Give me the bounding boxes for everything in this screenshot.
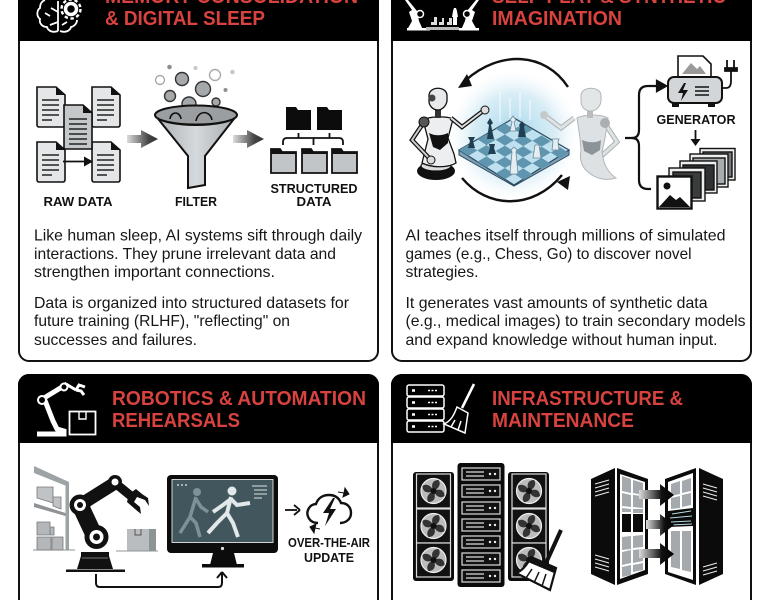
icon: cardboard box (116, 529, 158, 551)
text block: memory consolidation description: future training (RLHF), "reflecting" on (34, 313, 290, 330)
heading: self-play (492, 0, 726, 30)
text block: memory consolidation description (34, 228, 362, 349)
icon: robot arm and box (37, 384, 96, 436)
icon: generator printer (668, 56, 737, 107)
label: structured data: DATA (296, 194, 332, 209)
arrow: filter to structured data (233, 130, 264, 148)
illustration: factory robot arm (66, 475, 149, 572)
label: over-the-air update (288, 535, 371, 565)
icon: brain and gear (37, 0, 80, 32)
icon: filter funnel with bubbles (155, 65, 237, 188)
text block: memory consolidation description: Like human sleep, AI systems sift through daily (34, 228, 362, 244)
icon: cleaning broom (516, 530, 561, 590)
text block: self-play description (406, 228, 746, 349)
icon: robot arms and chess pieces (405, 0, 479, 30)
text block: memory consolidation description: successes and failures. (34, 332, 197, 349)
arrow: robot to monitor loop (96, 572, 227, 587)
label: generator: GENERATOR (656, 112, 736, 127)
label: structured data (270, 181, 358, 209)
illustration: chess board with glow (450, 71, 578, 199)
icon: simulation monitor (167, 475, 278, 568)
arrow: cycle top (458, 59, 568, 88)
icon: ghost robot player (540, 88, 617, 179)
illustration: server fans and racks (413, 463, 549, 587)
heading: robotics: ROBOTICS & AUTOMATION (112, 388, 366, 410)
text block: memory consolidation description: interactions. They prune irrelevant data and (34, 246, 336, 263)
heading: infrastructure (492, 388, 683, 432)
heading: robotics (112, 388, 366, 432)
heading: robotics: REHEARSALS (112, 410, 240, 432)
text block: self-play description: games (e.g., Chess, Go) to discover novel (406, 246, 692, 263)
label: filter: FILTER (175, 194, 218, 209)
arrow: monitor to update (285, 505, 300, 515)
heading: memory consolidation (105, 0, 358, 30)
arrow: generator down (690, 130, 700, 146)
text block: self-play description: It generates vast amounts of synthetic data (406, 295, 708, 312)
heading: memory consolidation: & DIGITAL SLEEP (105, 8, 265, 30)
heading: infrastructure: INFRASTRUCTURE & (492, 388, 683, 410)
heading: self-play: IMAGINATION (492, 8, 622, 30)
heading: infrastructure: MAINTENANCE (492, 410, 634, 432)
panel: robotics and automation rehearsals (18, 374, 379, 600)
icon: synthetic image stack (658, 148, 735, 208)
illustration: warehouse shelves (33, 466, 75, 550)
label: over-the-air update: OVER-THE-AIR (288, 535, 371, 550)
icon: server stack and broom (407, 384, 474, 433)
text block: memory consolidation description: strengthen important connections. (34, 264, 275, 281)
panel: infrastructure and maintenance (391, 374, 752, 600)
panel: memory consolidation and digital sleep (18, 0, 379, 361)
text block: memory consolidation description: Data is organized into structured datasets for (34, 295, 350, 312)
icon: over-the-air update cloud (307, 488, 351, 533)
illustration: server cabinets being reorganized (591, 468, 723, 585)
bracket arrow to generator and images (625, 81, 666, 189)
text block: self-play description: and expand knowledge without human input. (406, 332, 718, 349)
label: over-the-air update: UPDATE (304, 550, 354, 565)
text block: self-play description: (e.g., medical images) to train secondary models (406, 313, 746, 330)
arrow: cycle bottom (462, 175, 570, 201)
arrow: raw data to filter (127, 130, 158, 148)
text block: self-play description: strategies. (406, 264, 478, 281)
text block: self-play description: AI teaches itself through millions of simulated (406, 228, 726, 244)
panel: self-play and synthetic imagination (391, 0, 752, 361)
label: structured data: STRUCTURED (270, 181, 358, 196)
label: raw data: RAW DATA (44, 194, 113, 209)
icon: structured data folders (271, 107, 357, 173)
arrows: data moving between cabinets (639, 484, 674, 565)
icon: robot player (412, 88, 489, 180)
icon: raw data documents (37, 87, 120, 182)
